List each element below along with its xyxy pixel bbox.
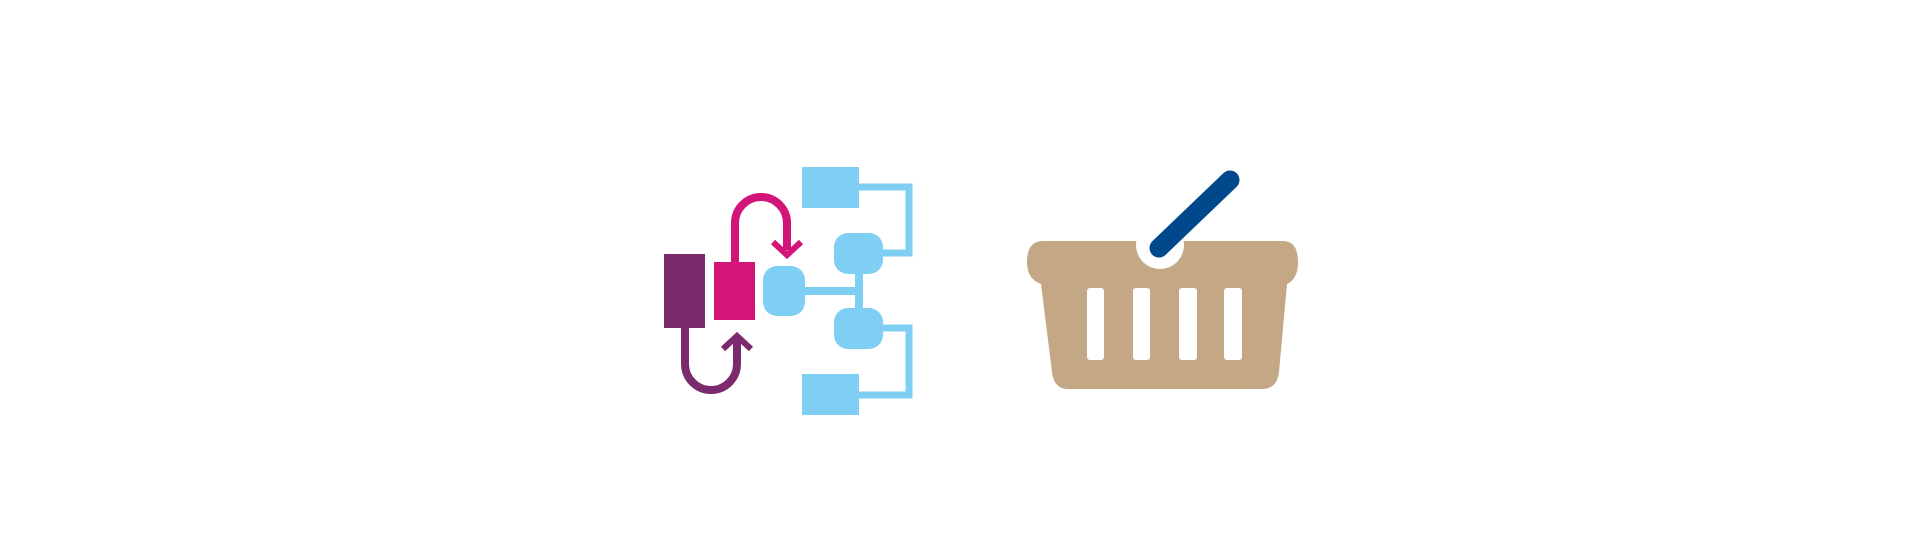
basket body [1027,241,1298,389]
icon: process flow diagram [664,167,909,415]
purple block with loop arrow [664,254,751,390]
handle notch [1136,221,1184,269]
magenta block with loop arrow [714,197,801,320]
basket slots [1087,288,1242,360]
icon: shopping basket [1027,180,1298,389]
handle [1159,180,1230,248]
blue tree structure [763,167,909,415]
